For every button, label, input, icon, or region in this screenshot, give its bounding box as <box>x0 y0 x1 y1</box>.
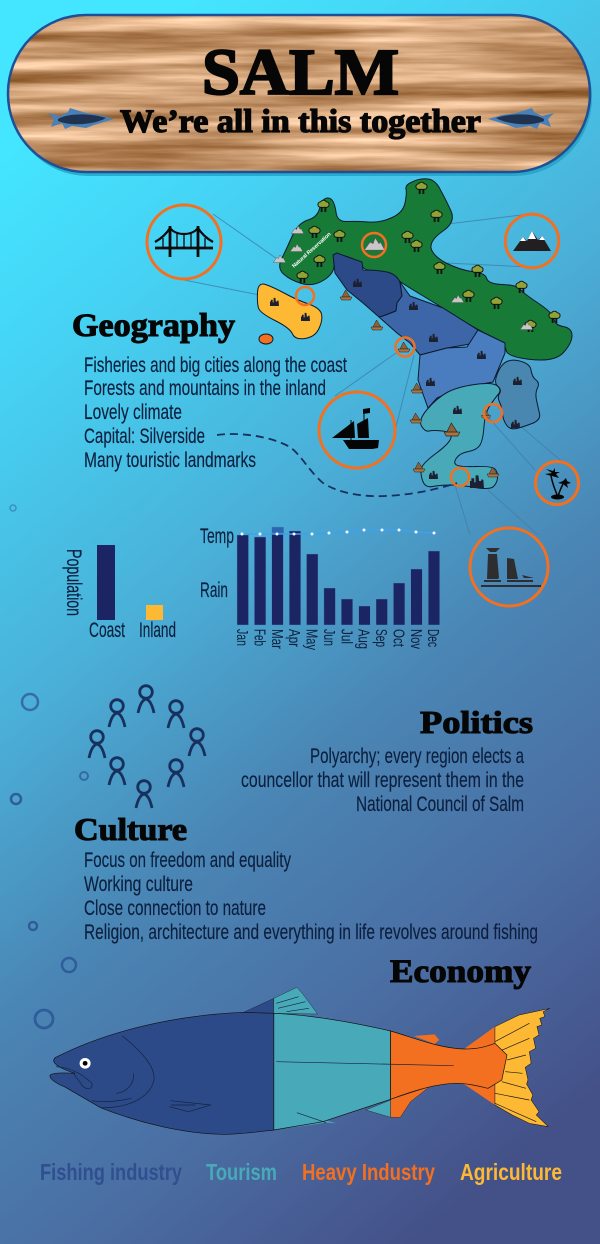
body details <box>56 1036 454 1123</box>
title plank <box>8 15 592 176</box>
connector lines <box>184 214 566 535</box>
culture text block: Close connection to nature <box>84 897 266 920</box>
bubbles <box>10 505 88 1028</box>
geography text block: Forests and mountains in the inland <box>84 377 326 400</box>
region: green forest <box>280 179 572 360</box>
subtitle: We’re all in this together <box>120 104 481 140</box>
politics text block: National Council of Salm <box>356 793 524 816</box>
month labels <box>233 629 441 650</box>
ventral fin <box>275 1113 337 1130</box>
population chart: Coast <box>89 619 125 642</box>
population chart <box>62 545 176 642</box>
eye <box>80 1058 91 1069</box>
region: light blue <box>418 330 505 408</box>
callout: ship <box>319 392 395 468</box>
body: tourism <box>274 1013 391 1130</box>
heading: culture: Culture <box>74 811 187 847</box>
month labels: Jan <box>233 629 250 646</box>
region: steel blue <box>496 360 540 429</box>
culture text block <box>84 849 538 944</box>
title: SALM <box>202 36 399 109</box>
rain bars <box>237 527 440 625</box>
politics text block <box>241 745 524 816</box>
legend: Agriculture <box>460 1159 562 1185</box>
callout: mountains <box>505 214 559 268</box>
dorsal fin <box>244 998 274 1013</box>
map icons: boats <box>340 290 499 477</box>
month labels: Dec <box>424 629 441 647</box>
geography text block: Lovely climate <box>84 401 182 424</box>
icon: salmon left <box>48 108 114 129</box>
region: medium blue <box>379 282 478 355</box>
climate chart <box>200 525 441 650</box>
icon: circle of people <box>89 686 205 808</box>
salmon economy diagram <box>50 987 550 1134</box>
culture text block: Working culture <box>84 873 193 896</box>
temp label: Temp <box>200 525 234 548</box>
geography text block: Fisheries and big cities along the coast <box>84 354 347 377</box>
dashed route line <box>217 434 457 496</box>
region: dark blue <box>333 253 402 317</box>
geography text block: Capital: Silverside <box>84 425 205 448</box>
heading: politics: Politics <box>420 704 533 740</box>
anal fin <box>366 1100 391 1117</box>
politics text block: Polyarchy; every region elects a <box>310 745 524 768</box>
legend <box>40 1159 562 1185</box>
map icons: mountains <box>273 226 533 330</box>
tail: orange base <box>464 1027 495 1105</box>
adipose fin <box>414 1034 439 1044</box>
month labels: Jul <box>337 629 354 644</box>
small orange map markers <box>296 233 502 486</box>
heading: geography: Geography <box>72 308 236 344</box>
map label: Natural Reservation <box>291 231 333 269</box>
culture text block: Focus on freedom and equality <box>84 849 291 872</box>
month labels: Sep <box>372 629 389 647</box>
month labels: Jun <box>320 629 337 646</box>
callout: palm island <box>536 462 578 504</box>
body: fishing industry <box>50 1012 274 1134</box>
month labels: Feb <box>250 629 267 646</box>
month labels: Aug <box>355 629 372 649</box>
map icons: cities <box>270 279 522 488</box>
rain label: Rain <box>200 579 228 602</box>
callout: ruins <box>470 528 548 606</box>
month labels: Oct <box>389 629 406 647</box>
legend: Fishing industry <box>40 1159 182 1185</box>
region: yellow island <box>257 284 322 339</box>
region: orange islet <box>259 334 273 344</box>
heading: economy: Economy <box>390 954 532 990</box>
tail: agriculture <box>495 1008 550 1127</box>
icon: salmon right <box>488 108 554 129</box>
month labels: Apr <box>285 629 302 647</box>
geography text block <box>84 354 347 472</box>
month labels: Mar <box>268 629 285 649</box>
temperature line <box>240 528 436 536</box>
population chart: Inland <box>139 619 176 642</box>
legend: Tourism <box>206 1159 277 1185</box>
region: teal <box>421 384 500 489</box>
geography text block: Many touristic landmarks <box>84 449 256 472</box>
population axis label: Population <box>62 549 85 616</box>
map <box>257 179 572 489</box>
month labels: May <box>302 629 320 650</box>
month labels: Nov <box>407 629 424 649</box>
legend: Heavy Industry <box>302 1159 435 1185</box>
callout: bridge <box>147 205 221 279</box>
body: heavy industry <box>391 1031 507 1099</box>
map icons: trees <box>297 182 560 331</box>
